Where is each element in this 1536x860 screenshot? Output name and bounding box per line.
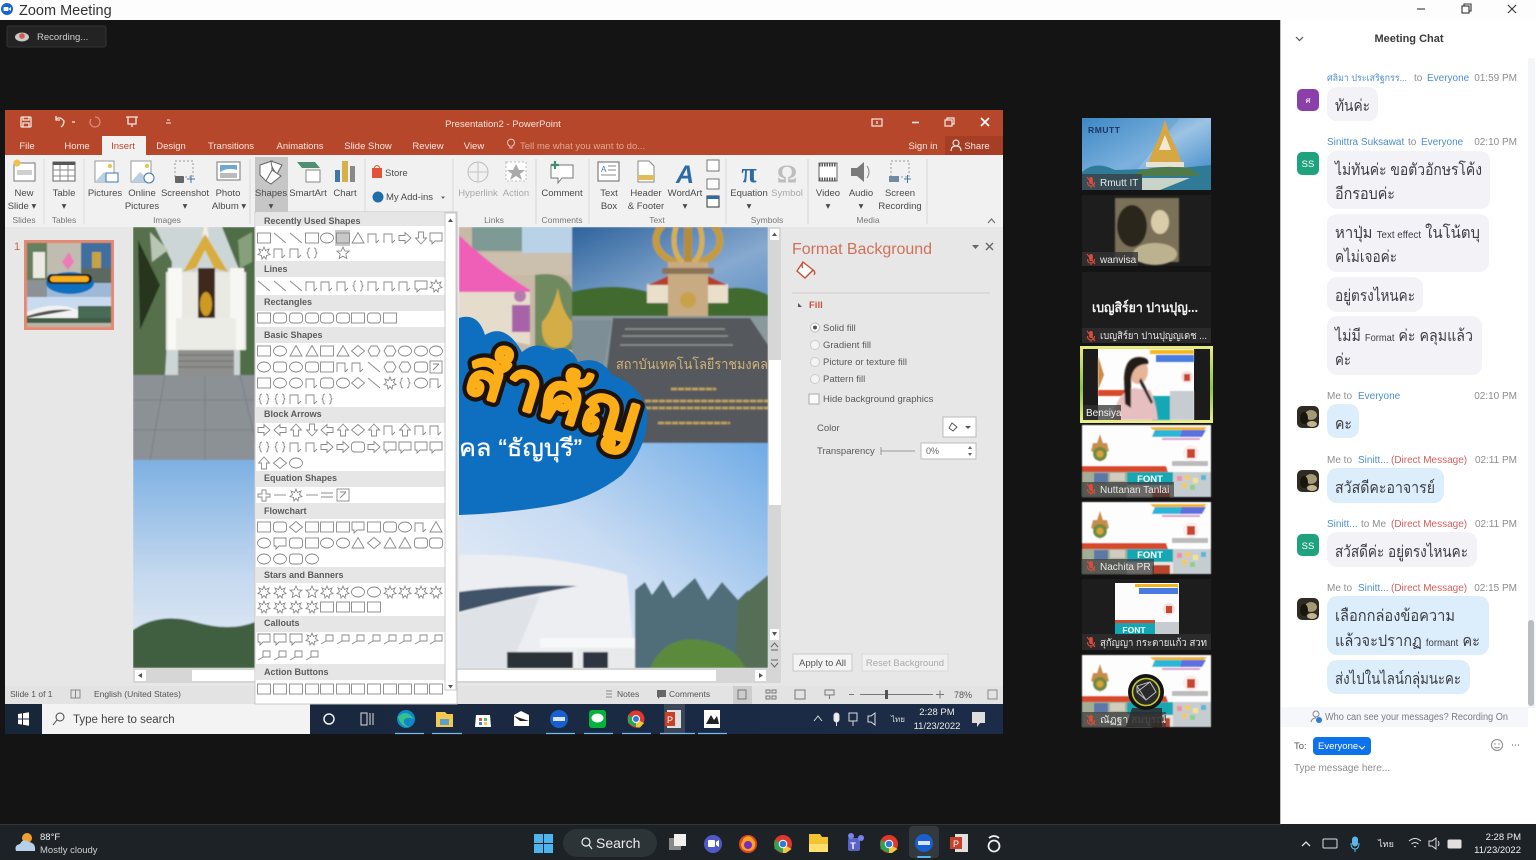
bubble 3: อยู่ตรงไหนคะ <box>1335 286 1415 306</box>
section headings: Block Arrows <box>264 409 322 419</box>
ribbon labels: ▾ <box>747 201 752 212</box>
avatar purple: ศ <box>1305 96 1311 105</box>
fill section <box>798 300 823 311</box>
recipient selector <box>1294 737 1371 755</box>
ribbon group labels: Text <box>649 215 665 225</box>
section headings <box>264 216 361 677</box>
icons: slides and tables <box>14 160 75 181</box>
bubble 2 <box>1327 214 1489 272</box>
icons: images group <box>95 161 240 183</box>
transparency control <box>817 443 976 459</box>
tile: Benjasiriya name only: เบญสิร์ยา ปานปุญญเดช ... <box>1100 330 1207 342</box>
message: me to everyone: 02:10 PM <box>1474 391 1517 402</box>
zoom title bar <box>0 0 1536 20</box>
message: me direct 02:11: Sinitt... <box>1358 455 1389 466</box>
ribbon labels: Equation <box>730 188 768 199</box>
tile: Nuttanan Tanlai: FONT <box>1137 474 1163 485</box>
tab labels: Review <box>412 141 444 152</box>
transparency control: 0% <box>926 446 939 456</box>
apply button <box>793 654 852 671</box>
tab labels: Design <box>156 141 186 152</box>
tile: Nachita PR: Nachita PR <box>1100 562 1151 573</box>
recipient selector: To: <box>1294 741 1307 752</box>
pinned apps: P <box>953 839 959 849</box>
ribbon labels: Header <box>630 188 662 199</box>
tile: Bensiya active speaker <box>1080 346 1213 423</box>
icon: fill bucket <box>797 262 815 278</box>
weather widget: 88°F <box>40 832 60 843</box>
tile: Natthida <box>1082 655 1211 727</box>
window controls <box>872 118 989 126</box>
tab labels: Transitions <box>208 141 254 152</box>
hide background checkbox: Hide background graphics <box>823 394 934 405</box>
tile: wanvisa <box>1082 195 1211 266</box>
ribbon labels: Comment <box>541 188 583 199</box>
message: Sinittra direct 02:11: 02:11 PM <box>1475 519 1517 530</box>
workspace background <box>5 227 1003 686</box>
message: Salima: 01:59 PM <box>1474 73 1517 84</box>
ribbon labels: Text <box>600 188 618 199</box>
ribbon group labels: Images <box>153 215 181 225</box>
system tray <box>1302 837 1461 852</box>
icons: links comments text: A <box>601 165 607 174</box>
messages: Sinittra <box>1297 137 1517 375</box>
taskbar apps <box>324 704 720 734</box>
ribbon <box>5 155 1003 227</box>
store and add-ins: My Add-ins <box>386 192 433 203</box>
tell me search: Tell me what you want to do... <box>520 141 645 152</box>
system tray <box>814 713 875 726</box>
message: Salima: ศลิมา ประเสริฐกรร... <box>1327 73 1407 84</box>
ribbon labels: Shapes <box>255 188 287 199</box>
title text fragment: สำคัญ <box>457 333 649 458</box>
tile: Rmutt IT <box>1082 118 1211 190</box>
icon: spelling <box>71 690 80 698</box>
fill radio options: Pattern fill <box>823 374 865 385</box>
chat scrollbar <box>1528 58 1535 708</box>
bubble: คะ <box>1335 416 1352 433</box>
ribbon labels: Action <box>503 188 529 199</box>
bubble <box>1327 468 1444 503</box>
photo: right column <box>457 216 768 668</box>
clock: 11/23/2022 <box>1474 845 1521 856</box>
fill radio options <box>810 323 907 385</box>
avatar SS <box>1297 152 1319 175</box>
search pill: Search <box>596 835 640 851</box>
section headings: Lines <box>264 264 288 274</box>
ribbon labels: Chart <box>333 188 357 199</box>
avatar SS: SS <box>1302 541 1314 552</box>
pane heading: Format Background <box>792 241 932 258</box>
tile: Nuttanan Tanlai <box>1082 425 1211 497</box>
color control: Color <box>817 423 840 434</box>
slide thumbnail panel: 1 <box>14 241 20 253</box>
messages: Sinittra: Everyone <box>1421 137 1464 148</box>
ribbon labels: Audio <box>849 188 873 199</box>
sign in and share <box>908 136 1003 155</box>
message: Sinittra direct 02:11: (Direct Message) <box>1391 519 1467 530</box>
shared slide behind speaker <box>1098 350 1194 420</box>
message: me direct 02:11: (Direct Message) <box>1391 455 1467 466</box>
section headings: Recently Used Shapes <box>264 216 361 226</box>
icon: cloud recording <box>15 32 29 42</box>
bubble 4: ค่ะ <box>1335 352 1351 369</box>
bubble: ทันค่ะ <box>1335 98 1370 115</box>
meeting chat panel <box>1280 20 1536 824</box>
bubble 1 <box>1327 151 1490 209</box>
weather widget: Mostly cloudy <box>40 845 98 856</box>
ribbon labels: & Footer <box>628 201 664 212</box>
bubble: สวัสดีค่ะ อยู่ตรงไหนคะ <box>1335 542 1468 562</box>
message: Sinittra direct 02:11: to Me <box>1361 519 1386 530</box>
thumbnail image <box>27 243 111 327</box>
building and pink decoration <box>459 227 572 357</box>
privacy notice <box>1281 707 1528 727</box>
zoom slider: 78% <box>954 690 972 700</box>
view buttons <box>733 686 834 704</box>
profile photo <box>1115 198 1179 265</box>
ribbon labels: Photo <box>216 188 240 199</box>
recording indicator <box>7 26 106 47</box>
weather widget <box>16 832 98 856</box>
notes and comments: Notes <box>617 689 639 699</box>
ribbon labels: Box <box>601 201 617 212</box>
notes and comments: Comments <box>669 689 710 699</box>
sign in and share: Sign in <box>908 141 938 152</box>
bubble 1: ไม่ทันค่ะ ขอตัวอักษรโค้ง <box>1333 160 1482 179</box>
icons: links comments text <box>468 160 719 207</box>
tab labels: File <box>19 141 35 152</box>
icons: symbols and media: π <box>741 158 757 189</box>
section bands <box>256 213 445 680</box>
transparency control: Transparency <box>817 446 875 457</box>
tile: Sukanya <box>1082 579 1211 650</box>
bubble 1 <box>1327 596 1489 655</box>
pinned apps: T <box>850 841 856 851</box>
ribbon labels: Pictures <box>88 188 122 199</box>
tile: Natthida: ณัฏฐา สมบูรณ์ <box>1100 714 1166 726</box>
photo: shrine <box>133 227 260 668</box>
quick access toolbar <box>21 116 171 127</box>
icon: floating network avatar <box>1126 674 1164 727</box>
message: me direct 02:11: Me to <box>1327 455 1352 466</box>
ribbon labels: Table <box>53 188 75 199</box>
fill radio options: Solid fill <box>823 323 856 334</box>
tile: Bensiya active speaker: Bensiya <box>1086 408 1122 419</box>
messages: me direct 02:15: (Direct Message) <box>1391 583 1467 594</box>
messages: me direct 02:15 <box>1297 583 1517 694</box>
windows taskbar inside shared screen <box>5 704 1003 734</box>
section headings: Rectangles <box>264 297 312 307</box>
shapes gallery dropdown <box>255 212 457 704</box>
tab labels: View <box>464 141 484 152</box>
ribbon group labels <box>12 215 880 225</box>
message input placeholder: Type message here... <box>1294 763 1390 774</box>
bubble 2: ส่งไปในไลน์กลุ่มนะคะ <box>1335 669 1461 689</box>
ribbon labels: Hyperlink <box>458 188 498 199</box>
pane controls <box>972 243 993 250</box>
tile: Rmutt IT: Rmutt IT <box>1100 178 1138 189</box>
bubble <box>1327 532 1477 567</box>
tab labels: Home <box>64 141 90 152</box>
ribbon labels: Symbol <box>771 188 803 199</box>
search pill <box>563 829 657 857</box>
icons: symbols and media <box>741 158 911 189</box>
active app underlines <box>395 732 727 734</box>
title text fragment: สำคัญ <box>457 333 649 458</box>
ribbon labels: ▾ <box>183 201 188 212</box>
small slide preview: FONT <box>1122 625 1146 635</box>
slide thumbnail panel <box>14 240 114 330</box>
ribbon labels: SmartArt <box>289 188 327 199</box>
avatar purple <box>1297 89 1319 111</box>
ribbon labels: Album ▾ <box>212 201 246 212</box>
blue title blob <box>457 317 649 515</box>
section headings: Basic Shapes <box>264 330 323 340</box>
tab labels: Slide Show <box>344 141 392 152</box>
reset button: Reset Background <box>866 658 944 669</box>
slide canvas <box>133 216 781 683</box>
tile: wanvisa: wanvisa <box>1099 255 1137 266</box>
ribbon labels: ▾ <box>62 201 67 212</box>
chat heading <box>1296 33 1444 45</box>
message: me to everyone <box>1297 391 1517 438</box>
icon: start button <box>534 834 553 853</box>
bubble 1: แล้วจะปรากฏ formant คะ <box>1335 632 1480 650</box>
keyboard language: ไทย <box>1377 839 1394 849</box>
participant gallery <box>1080 118 1213 727</box>
message: me to everyone: Everyone <box>1358 391 1401 402</box>
store and add-ins <box>385 168 445 203</box>
ribbon group labels: Symbols <box>751 215 783 225</box>
recipient selector: Everyone <box>1318 741 1358 752</box>
recording indicator: Recording... <box>37 32 88 43</box>
bubble 4 <box>1327 316 1482 375</box>
bubble <box>1327 87 1378 121</box>
format background pane <box>782 227 1003 686</box>
fill section: Fill <box>809 300 823 311</box>
tab labels <box>19 141 484 152</box>
ribbon labels: Online <box>128 188 156 199</box>
ribbon labels: Slide ▾ <box>8 201 36 212</box>
message: me direct 02:11 <box>1297 455 1517 503</box>
emoji and more icons <box>1492 740 1519 750</box>
ribbon labels: Video <box>816 188 840 199</box>
ribbon labels <box>8 188 922 212</box>
ribbon labels: ▾ <box>826 201 831 212</box>
section headings: Equation Shapes <box>264 473 337 483</box>
selected shape highlight <box>335 230 350 246</box>
message: Sinittra direct 02:11: Sinitt... <box>1327 519 1358 530</box>
sign in and share: Share <box>964 141 990 152</box>
section headings: Flowchart <box>264 506 307 516</box>
photo: monument <box>571 227 768 296</box>
bubble 2: คไม่เจอค่ะ <box>1335 247 1397 266</box>
bubble 3 <box>1327 277 1423 312</box>
ribbon group labels: Links <box>484 215 504 225</box>
ribbon labels: Screenshot <box>161 188 209 199</box>
message: me to everyone: Me to <box>1327 391 1352 402</box>
color control <box>817 417 976 437</box>
shapes highlight <box>255 157 288 213</box>
messages: Sinittra: Sinittra Suksawat <box>1327 137 1404 148</box>
window title: Zoom Meeting <box>19 3 112 19</box>
status bar <box>5 686 1003 704</box>
ribbon labels: Pictures <box>125 201 159 212</box>
photo: sky left <box>133 459 254 631</box>
fill radio options: Picture or texture fill <box>823 357 907 368</box>
search box <box>42 704 310 734</box>
tile: Nachita PR <box>1082 502 1211 574</box>
clock <box>1474 832 1521 856</box>
icon: windows start <box>18 712 29 726</box>
powerpoint window <box>5 110 1003 734</box>
chat heading: Meeting Chat <box>1374 33 1444 45</box>
section headings: Callouts <box>264 618 300 628</box>
collapse ribbon arrow <box>988 219 995 223</box>
icons: links comments text: A <box>675 161 694 189</box>
icons: symbols and media: Ω <box>777 161 797 188</box>
taskbar apps: P <box>667 715 673 725</box>
pinned apps <box>669 826 1000 858</box>
zoom slider <box>849 690 997 700</box>
tab labels: Animations <box>276 141 324 152</box>
section headings: Action Buttons <box>264 667 328 677</box>
bubble 4: ไม่มี Format ค่ะ คลุมแล้ว <box>1333 326 1473 346</box>
messages: me direct 02:15: Me to <box>1327 583 1352 594</box>
bubble <box>1327 404 1359 438</box>
clock <box>914 707 960 732</box>
ribbon labels: WordArt <box>668 188 703 199</box>
icon: zoom logo <box>1 3 13 15</box>
ribbon labels: ▾ <box>859 201 864 212</box>
tile: Benjasiriya name only: เบญสิร์ยา ปานปุญ... <box>1092 299 1198 316</box>
message: Salima: to <box>1414 73 1423 84</box>
dropdown scrollbar <box>445 213 456 690</box>
keyboard language: ไทย <box>890 715 905 724</box>
bubble 1: อีกรอบค่ะ <box>1335 185 1395 203</box>
ribbon labels: Recording <box>878 201 922 212</box>
title bar and tabs <box>5 110 1003 155</box>
ribbon group labels: Comments <box>541 215 583 225</box>
icons: illustrations <box>260 161 384 202</box>
photo: lower sky and building <box>459 442 768 638</box>
status bar: Slide 1 of 1 <box>10 689 53 699</box>
fill radio options: Gradient fill <box>823 340 871 351</box>
avatar SS <box>1297 534 1319 556</box>
ribbon labels: Screen <box>885 188 915 199</box>
engraved monument text: สถาบันเทคโนโลยีราชมงคล <box>616 356 768 372</box>
clock: 11/23/2022 <box>914 721 960 732</box>
windows 11 taskbar <box>0 824 1536 860</box>
tile: Sukanya: สุกัญญา กระตายแก้ว สวท <box>1100 637 1207 649</box>
message: Sinittra direct 02:11 <box>1297 519 1517 567</box>
reset button <box>862 654 948 671</box>
search box: Type here to search <box>73 714 175 726</box>
bubble: สวัสดีคะอาจารย์ <box>1335 478 1435 497</box>
privacy notice: Who can see your messages? Recording On <box>1325 712 1508 723</box>
section headings: Stars and Banners <box>264 570 344 580</box>
subtitle text fragment: คล “ธัญบุรี” <box>459 435 582 463</box>
slide scrollbars <box>133 227 781 683</box>
tile: Benjasiriya name only <box>1082 272 1211 343</box>
messages: me direct 02:15: 02:15 PM <box>1474 583 1517 594</box>
ribbon group labels: Media <box>856 215 880 225</box>
logo text: RMUTT <box>1088 125 1121 135</box>
status bar: English (United States) <box>94 689 181 699</box>
bubble 2 <box>1327 660 1470 694</box>
ribbon group labels: Slides <box>12 215 36 225</box>
apply button: Apply to All <box>799 658 846 669</box>
tab labels: Insert <box>111 141 135 152</box>
window controls <box>1417 4 1516 13</box>
store and add-ins: Store <box>385 168 408 179</box>
clock: 2:28 PM <box>919 707 955 718</box>
messages: Sinittra: 02:10 PM <box>1474 137 1517 148</box>
speaker <box>1113 357 1158 420</box>
message: Salima: Everyone <box>1427 73 1470 84</box>
ribbon labels: ▾ <box>683 201 688 212</box>
ribbon labels: ▾ <box>269 201 274 212</box>
bubble 2: หาปุ่ม Text effect ในโน้ตบุ <box>1335 223 1480 243</box>
shape icons <box>258 232 442 694</box>
ribbon labels: New <box>14 188 34 199</box>
ribbon group labels: Tables <box>52 215 76 225</box>
message: Salima <box>1297 73 1517 121</box>
messages: Sinittra: to <box>1408 137 1417 148</box>
tile: Nuttanan Tanlai: Nuttanan Tanlai <box>1100 485 1169 496</box>
presentation name: Presentation2 - PowerPoint <box>445 119 561 130</box>
icon: notifications <box>972 712 985 727</box>
tile: Nachita PR: FONT <box>1137 550 1163 561</box>
messages: me direct 02:15: Sinitt... <box>1358 583 1389 594</box>
notes and comments <box>606 689 710 699</box>
bubble 1: เลือกกล่องข้อความ <box>1335 607 1455 625</box>
clock: 2:28 PM <box>1486 832 1521 843</box>
message: me direct 02:11: 02:11 PM <box>1475 455 1517 466</box>
insert tab highlight <box>102 136 146 155</box>
avatar SS: SS <box>1302 159 1314 170</box>
